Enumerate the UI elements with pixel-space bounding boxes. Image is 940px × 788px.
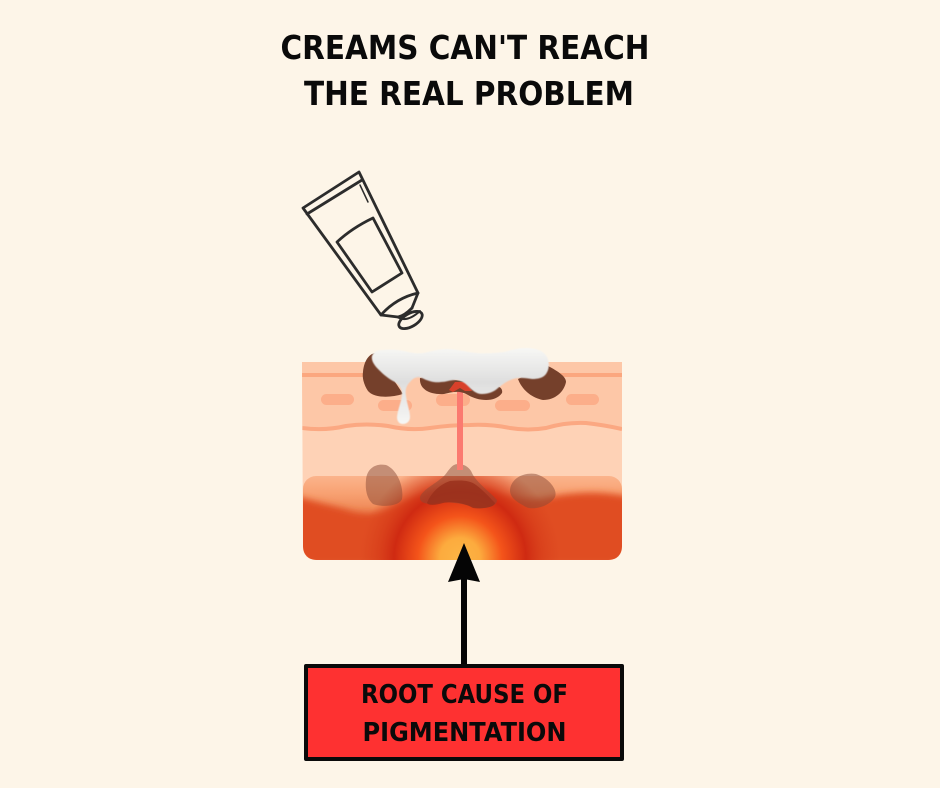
pigment column xyxy=(457,386,463,470)
deep red layer xyxy=(303,476,622,560)
deep pigment spots xyxy=(366,464,556,508)
callout: root cause: PIGMENTATION xyxy=(362,718,566,748)
skin layers xyxy=(295,362,630,565)
icon: cream tube xyxy=(303,172,425,332)
red spot under cream xyxy=(449,382,472,392)
callout: root cause: ROOT CAUSE OF xyxy=(361,680,568,710)
title xyxy=(280,28,650,113)
title: CREAMS CAN'T REACH xyxy=(280,28,650,67)
cream blob xyxy=(372,348,549,424)
title: THE REAL PROBLEM xyxy=(304,74,634,113)
skin cells xyxy=(321,394,599,411)
arrow xyxy=(448,543,480,666)
illustration: skin cross-section xyxy=(295,348,630,565)
callout: root cause xyxy=(306,666,622,759)
wavy skin layer line xyxy=(302,423,622,430)
surface pigment spots xyxy=(363,353,566,400)
skin surface line xyxy=(302,373,622,377)
dark red core of pigment xyxy=(427,480,495,508)
heat glow xyxy=(372,476,548,560)
